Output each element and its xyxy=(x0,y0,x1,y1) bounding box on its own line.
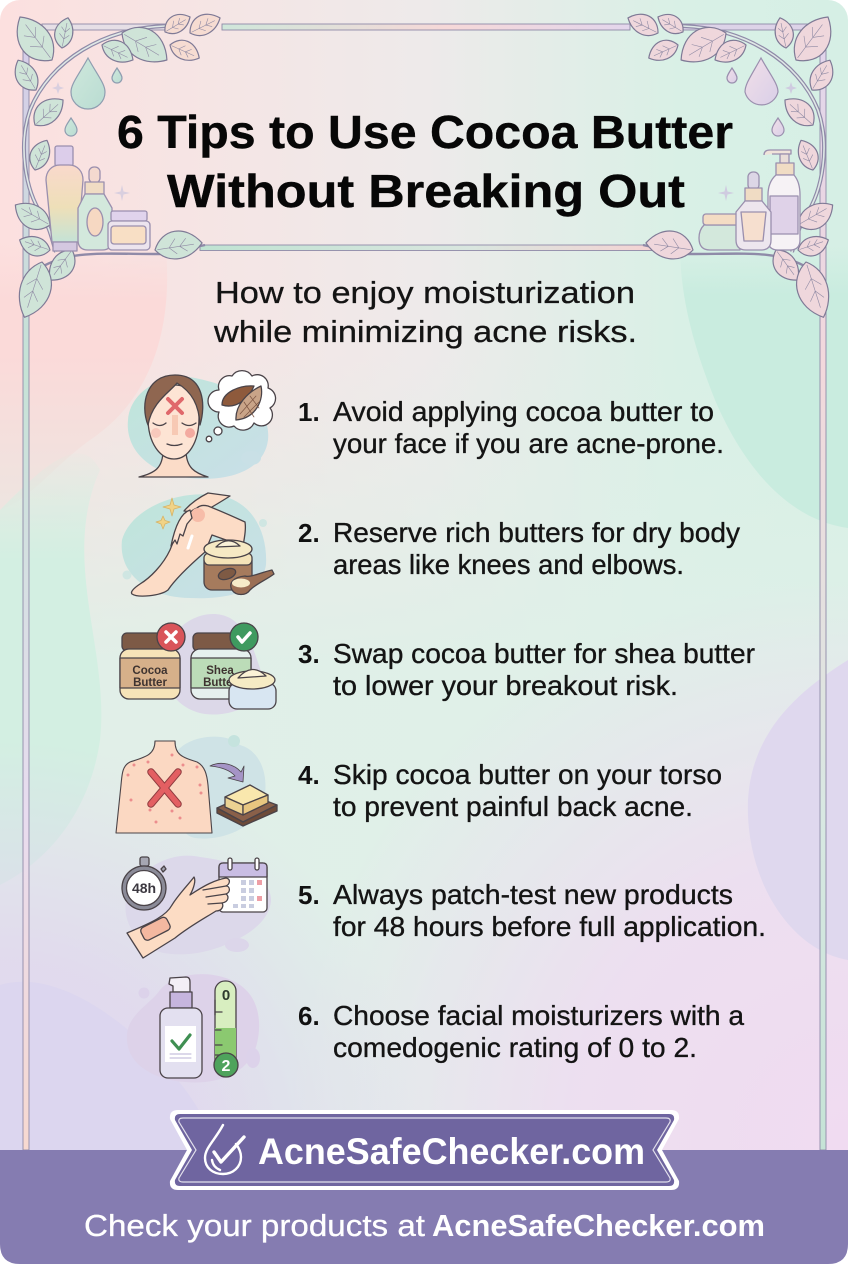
tip 4 text: 4. xyxy=(298,760,320,790)
icon: water drops right xyxy=(727,58,784,136)
subtitle: while minimizing acne risks. xyxy=(213,314,637,349)
logo badge xyxy=(170,1110,679,1190)
title: 6 Tips to Use Cocoa Butter xyxy=(117,106,733,158)
tip 3 text: to lower your breakout risk. xyxy=(333,670,678,701)
tip 1 text: Avoid applying cocoa butter to xyxy=(333,396,714,427)
vine corner: top right xyxy=(624,8,842,322)
tip 1 xyxy=(128,371,724,479)
brand name: AcneSafeChecker.com xyxy=(258,1131,645,1172)
tip 1 text: 1. xyxy=(298,397,320,427)
icon: pump bottle and rating scale: 0 xyxy=(222,987,230,1004)
sparkles left xyxy=(52,82,130,201)
tip 2 text xyxy=(298,517,740,580)
tip 3 text: 3. xyxy=(298,639,320,669)
footer band xyxy=(0,1150,848,1264)
tip 6 text xyxy=(298,1000,745,1063)
tip 6 xyxy=(127,974,745,1083)
icon: cosmetic bottles left xyxy=(46,146,150,251)
icon: cocoa and shea jars: Butter xyxy=(133,677,167,689)
tip 5 text xyxy=(298,879,766,942)
tip 4 text xyxy=(298,759,722,822)
icon: drop with check xyxy=(205,1125,244,1174)
title: Without Breaking Out xyxy=(167,165,685,217)
icon: cosmetic bottles right xyxy=(699,150,800,250)
icon: cocoa and shea jars xyxy=(120,614,276,715)
tip 5 text: 5. xyxy=(298,880,320,910)
sparkles right xyxy=(718,82,797,201)
icon: leg with butter jar xyxy=(122,493,274,598)
tip 6 text: Choose facial moisturizers with a xyxy=(333,1000,745,1031)
tip 2 text: 2. xyxy=(298,518,320,548)
tip 1 text xyxy=(298,396,724,459)
tip 5 text: Always patch-test new products xyxy=(333,879,733,910)
icon: stopwatch, arm and calendar: 48h xyxy=(132,880,156,896)
title xyxy=(117,106,733,217)
icon: pump bottle and rating scale: 2 xyxy=(222,1058,231,1075)
tip 3 text xyxy=(298,638,755,701)
icon: stopwatch, arm and calendar xyxy=(122,856,271,958)
tip 3 text: Swap cocoa butter for shea butter xyxy=(333,638,755,669)
tip 5 xyxy=(122,856,766,958)
tip 1 text: your face if you are acne-prone. xyxy=(333,428,724,459)
tip 2 xyxy=(122,493,740,598)
tip 2 text: Reserve rich butters for dry body xyxy=(333,517,740,548)
footer text: Check your products at xyxy=(84,1208,425,1243)
icon: pump bottle and rating scale xyxy=(127,974,260,1083)
subtitle: How to enjoy moisturization xyxy=(215,275,635,310)
tip 6 text: comedogenic rating of 0 to 2. xyxy=(333,1032,697,1063)
footer text: AcneSafeChecker.com xyxy=(432,1208,765,1243)
icon: cocoa and shea jars: Shea xyxy=(206,665,234,677)
tip 4 xyxy=(116,735,722,839)
icon: cocoa and shea jars: Cocoa xyxy=(132,665,168,677)
tip 5 text: for 48 hours before full application. xyxy=(333,911,766,942)
tip 4 text: Skip cocoa butter on your torso xyxy=(333,759,722,790)
tip 6 text: 6. xyxy=(298,1001,320,1031)
vine corner: top left xyxy=(6,8,224,322)
icon: cocoa and shea jars: Butter xyxy=(203,677,237,689)
tip 2 text: areas like knees and elbows. xyxy=(333,549,684,580)
subtitle xyxy=(213,275,637,349)
tip 3 xyxy=(120,614,755,715)
icon: water drops left xyxy=(65,58,122,136)
icon: back with butter block xyxy=(116,735,277,839)
icon: face and cocoa pod xyxy=(128,371,276,479)
footer text xyxy=(84,1208,765,1243)
tip 4 text: to prevent painful back acne. xyxy=(333,791,693,822)
